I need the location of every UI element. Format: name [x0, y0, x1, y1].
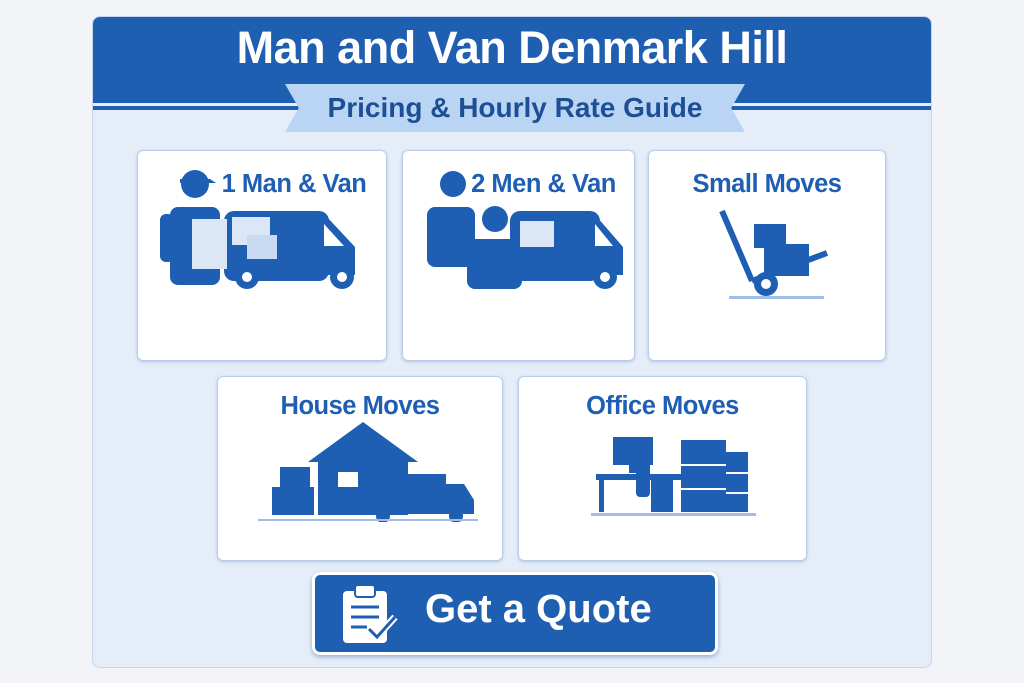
card: house moves: House Moves — [281, 392, 439, 420]
icon: hand trolley — [719, 210, 828, 299]
card: small moves: Small Moves — [692, 170, 841, 198]
card: 1 man & van — [137, 150, 387, 361]
button: get a quote — [312, 572, 718, 655]
card: small moves — [648, 150, 886, 361]
card: house moves — [217, 376, 503, 561]
icon: house and truck — [258, 422, 478, 522]
icon: two men with van — [427, 171, 623, 289]
header band — [93, 17, 933, 103]
icon: desk and cabinets — [591, 437, 756, 516]
icon: clipboard — [343, 586, 398, 643]
button: get a quote: Get a Quote — [425, 587, 652, 631]
card: 2 men & van: 2 Men & Van — [471, 170, 616, 198]
main panel — [92, 16, 932, 668]
card: 2 men & van — [402, 150, 635, 361]
title: Man and Van Denmark Hill — [237, 22, 787, 73]
card: 1 man & van: 1 Man & Van — [222, 170, 366, 198]
icon: man with van — [160, 170, 355, 289]
ribbon subtitle: Pricing & Hourly Rate Guide — [328, 92, 702, 123]
card: office moves — [518, 376, 807, 561]
ribbon subtitle — [285, 84, 745, 132]
card: office moves: Office Moves — [586, 392, 739, 420]
